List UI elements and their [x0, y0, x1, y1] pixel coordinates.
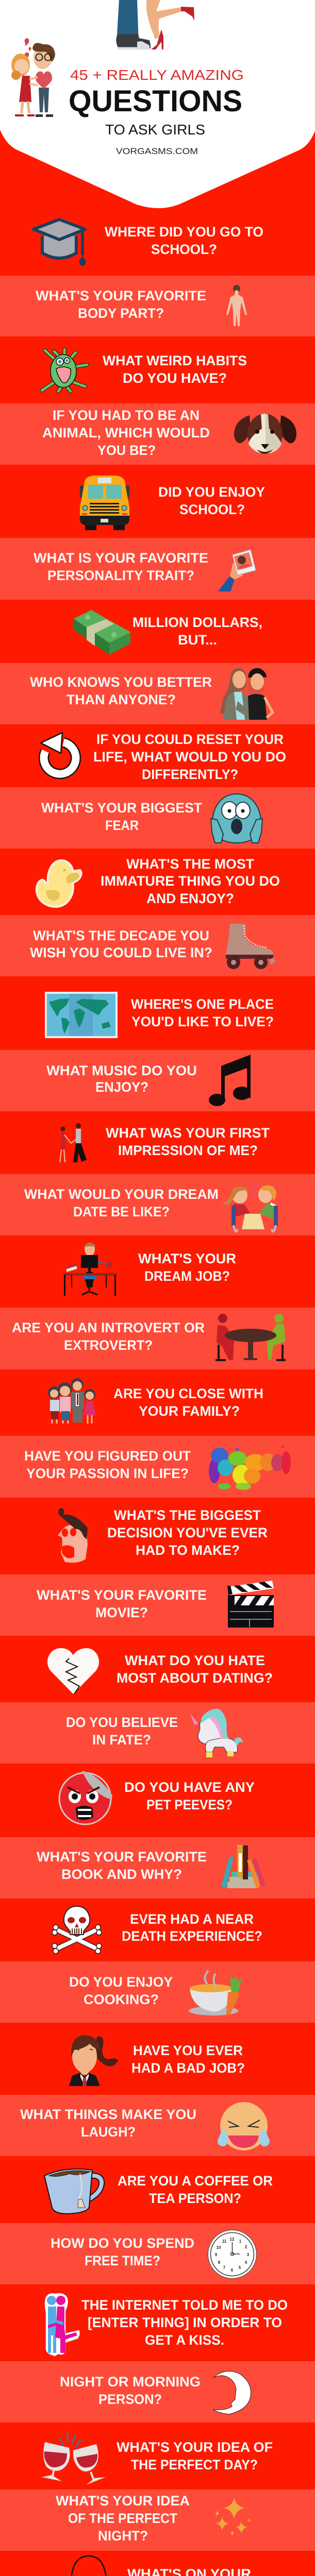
panel: question 22: [0, 1574, 315, 1636]
icon: green germ monster: [42, 349, 87, 392]
question text: GET A KISS.: [145, 2332, 224, 2348]
title: VORGASMS.COM: [116, 146, 198, 156]
question text: DIFFERENTLY?: [142, 767, 238, 782]
question text: [ENTER THING] IN ORDER TO: [88, 2315, 282, 2330]
panel: question 4: [0, 403, 315, 465]
question text: DO YOU HAVE?: [123, 370, 227, 386]
panel: question 24: [0, 1702, 315, 1764]
panel: question 12: [0, 915, 315, 976]
panel: question 35: [0, 2422, 315, 2489]
question text: DO YOU BELIEVE: [66, 1715, 178, 1730]
question text: FREE TIME?: [85, 2253, 160, 2268]
icon: crescent moon: [213, 2371, 251, 2414]
icon: world map: [45, 992, 118, 1038]
icon: couple holding hands: [60, 1123, 87, 1162]
question text: WHAT IS YOUR FAVORITE: [34, 550, 208, 566]
question text: WHAT WOULD YOUR DREAM: [24, 1187, 219, 1202]
question text: WHAT'S YOUR IDEA: [56, 2493, 190, 2509]
question text: [36, 288, 206, 321]
question text: DATE BE LIKE?: [73, 1204, 170, 1219]
question text: THAN ANYONE?: [67, 692, 176, 707]
question text: OF THE PERFECT: [68, 2511, 177, 2526]
question text: [122, 1911, 262, 1944]
panel: question 7: [0, 600, 315, 663]
question text: [117, 1653, 273, 1686]
question text: WHO KNOWS YOU BETTER: [30, 674, 212, 690]
question text: [37, 1849, 207, 1882]
icon: shouting man head: [58, 1508, 88, 1563]
question text: IN FATE?: [92, 1732, 151, 1748]
question text: MILLION DOLLARS,: [132, 615, 262, 630]
panel: question 36: [0, 2489, 315, 2551]
question text: [41, 800, 202, 833]
question text: [138, 1251, 236, 1284]
question text: MOST ABOUT DATING?: [117, 1670, 273, 1686]
question text: YOUR FAMILY?: [139, 1403, 240, 1419]
icon: laughing emoji: [218, 2102, 270, 2150]
question text: WHAT'S YOUR FAVORITE: [36, 288, 206, 303]
icon: reset arrow: [41, 733, 76, 774]
question text: WHAT'S THE MOST: [126, 856, 254, 872]
question text: BOOK AND WHY?: [61, 1867, 182, 1882]
title: TO ASK GIRLS: [105, 122, 205, 138]
question text: ARE YOU A COFFEE OR: [118, 2173, 273, 2189]
icon: wall clock: 5: [239, 2265, 241, 2270]
question text: [30, 928, 212, 960]
question text: EXTROVERT?: [64, 1337, 153, 1353]
panel: question 33: [0, 2284, 315, 2361]
panel: question 26: [0, 1837, 315, 1899]
question text: TEA PERSON?: [149, 2191, 241, 2206]
question text: [51, 2235, 194, 2268]
question text: WHAT MUSIC DO YOU: [46, 1063, 197, 1078]
icon: sparkles: [215, 2498, 251, 2536]
question text: [103, 353, 247, 386]
question text: WHAT'S YOUR: [138, 1251, 236, 1266]
question text: COOKING?: [84, 1992, 159, 2007]
question text: WISH YOU COULD LIVE IN?: [30, 945, 212, 960]
panel: question 20: [0, 1436, 315, 1498]
panel: question 34: [0, 2361, 315, 2422]
question text: YOU'D LIKE TO LIVE?: [131, 1014, 274, 1029]
question text: [118, 2173, 273, 2206]
question text: HAVE YOU FIGURED OUT: [24, 1448, 191, 1464]
question text: SCHOOL?: [151, 242, 217, 257]
icon: wall clock: [208, 2230, 257, 2278]
question text: [106, 1125, 270, 1158]
panel: question 13: [0, 976, 315, 1050]
panel: question 6: [0, 538, 315, 600]
icon: wall clock: 11: [222, 2239, 227, 2244]
icon: wall clock: 8: [218, 2260, 221, 2265]
question text: [81, 2297, 288, 2348]
question text: WHERE DID YOU GO TO: [105, 224, 263, 240]
panel: question 31: [0, 2156, 315, 2223]
question text: [124, 1780, 255, 1812]
question text: [101, 856, 280, 906]
icon: unicorn: [190, 1709, 243, 1757]
title: 45 + REALLY AMAZING: [70, 67, 244, 83]
question text: THE INTERNET TOLD ME TO DO: [81, 2297, 288, 2313]
icon: hand holding photo: [218, 550, 256, 591]
question text: IMPRESSION OF ME?: [118, 1143, 258, 1158]
icon: wall clock: 3: [247, 2252, 250, 2257]
panel: question 28: [0, 1961, 315, 2023]
icon: wall clock: 12: [230, 2237, 235, 2242]
question text: LAUGH?: [81, 2124, 136, 2140]
question text: WHAT THINGS MAKE YOU: [20, 2107, 196, 2122]
question text: [20, 2107, 196, 2140]
panel: question 17: [0, 1235, 315, 1308]
icon: stack of books: [221, 1845, 266, 1888]
panel: question 1: [34, 219, 263, 266]
question text: YOU BE?: [97, 443, 156, 458]
panel: question 8: [0, 663, 315, 724]
question text: [42, 408, 210, 458]
question text: BODY PART?: [78, 306, 164, 321]
question text: AND ENJOY?: [146, 891, 234, 906]
header panel: [0, 0, 315, 208]
question text: [69, 1974, 173, 2007]
icon: two people at table: [215, 1314, 286, 1360]
icon: angry face sticker: [59, 1771, 112, 1824]
icon: wall clock: 10: [217, 2245, 221, 2250]
question text: HAD A BAD JOB?: [131, 2060, 245, 2076]
question text: DID YOU ENJOY: [158, 484, 265, 500]
question text: WHAT'S YOUR IDEA OF: [117, 2439, 273, 2455]
question text: WHAT'S THE BIGGEST: [114, 1507, 261, 1523]
icon: soup bowl and carrot: [189, 1971, 242, 2015]
question text: [113, 1386, 263, 1419]
question text: WHAT'S YOUR FAVORITE: [37, 1849, 207, 1865]
question text: HAVE YOU EVER: [133, 2043, 243, 2058]
icon: wall clock: 6: [231, 2268, 234, 2273]
panel: question 32: [0, 2223, 315, 2284]
icon: music notes: [209, 1055, 251, 1106]
question text: WHERE'S ONE PLACE: [131, 996, 274, 1012]
question text: WHAT'S THE DECADE YOU: [33, 928, 209, 943]
panel: question 16: [0, 1174, 315, 1235]
icon: kissing figures sticker: [45, 2293, 80, 2356]
question text: [60, 2374, 201, 2407]
icon: school bus: [80, 476, 129, 530]
question text: DO YOU ENJOY: [69, 1974, 173, 1990]
panel: question 10: [0, 787, 315, 849]
icon: dog face: [234, 414, 296, 454]
panel: question 5: [0, 465, 315, 538]
question text: [30, 674, 212, 707]
question text: WHAT'S YOUR FAVORITE: [37, 1587, 207, 1603]
panel: question 25: [0, 1764, 315, 1837]
icon: wall clock: 2: [245, 2245, 247, 2249]
question text: [24, 1187, 219, 1219]
question text: IF YOU COULD RESET YOUR: [96, 732, 284, 747]
panel: question 14: [0, 1050, 315, 1111]
title: [69, 67, 244, 156]
panel: question 15: [0, 1111, 315, 1174]
question text: [105, 224, 263, 257]
question text: WHAT DO YOU HATE: [125, 1653, 265, 1668]
question text: [93, 732, 286, 782]
icon: wall clock: 7: [223, 2265, 226, 2270]
question text: WHAT'S YOUR BIGGEST: [41, 800, 202, 816]
icon: skull and crossbones: [52, 1906, 102, 1954]
question text: [66, 1715, 178, 1748]
question text: ENJOY?: [95, 1079, 148, 1095]
icon: stack of money: [74, 610, 130, 655]
question text: IMMATURE THING YOU DO: [101, 873, 280, 889]
title: QUESTIONS: [69, 84, 242, 118]
panel: question 23: [0, 1636, 315, 1702]
question text: [46, 1063, 197, 1095]
question text: MOVIE?: [95, 1605, 148, 1620]
panel: question 21: [0, 1498, 315, 1574]
panel: question 18: [0, 1308, 315, 1369]
question text: NIGHT OR MORNING: [60, 2374, 201, 2389]
question text: PERSONALITY TRAIT?: [47, 568, 194, 583]
panel: question 27: [0, 1899, 315, 1961]
question text: [117, 2439, 273, 2472]
question text: ARE YOU AN INTROVERT OR: [12, 1320, 205, 1335]
question text: [132, 615, 262, 648]
panel: question 9: [0, 724, 315, 787]
question text: HOW DO YOU SPEND: [51, 2235, 194, 2251]
icon: graduation cap: [34, 219, 86, 266]
icon: wall clock: 9: [215, 2252, 218, 2257]
icon: film clapperboard: [227, 1581, 274, 1628]
icon: broken heart: [47, 1648, 99, 1694]
icon: mug with tea bag: [44, 2169, 102, 2214]
icon: couple on dinner date: [221, 1180, 278, 1231]
icon: rainbow paint splash: [209, 1443, 291, 1490]
question text: PERSON?: [98, 2392, 162, 2407]
panel: question 19: [0, 1369, 315, 1436]
question text: DREAM JOB?: [144, 1268, 230, 1284]
panel: question 3: [0, 336, 315, 403]
question text: ARE YOU CLOSE WITH: [113, 1386, 263, 1401]
icon: scared face: [211, 794, 262, 843]
illustration: kissing couple legs: [116, 0, 194, 49]
icon: person at desk: [63, 1243, 117, 1296]
question text: [12, 1320, 205, 1353]
icon: wall clock: 1: [239, 2239, 242, 2244]
question text: ANIMAL, WHICH WOULD: [42, 425, 210, 440]
question text: NIGHT?: [98, 2528, 148, 2544]
icon: wall clock: 4: [245, 2260, 247, 2265]
question text: WHAT WAS YOUR FIRST: [106, 1125, 270, 1141]
question text: DEATH EXPERIENCE?: [122, 1928, 262, 1944]
panel: question 29: [0, 2023, 315, 2095]
icon: human body: [226, 285, 247, 326]
question text: DECISION YOU'VE EVER: [107, 1525, 268, 1540]
panel: question 37: [0, 2551, 315, 2576]
question text: IF YOU HAD TO BE AN: [53, 408, 200, 423]
question text: FEAR: [105, 818, 139, 833]
illustration: cartoon couple holding heart: [11, 38, 55, 117]
question text: [37, 1587, 207, 1620]
question text: [131, 2043, 245, 2076]
panel: question 11: [0, 849, 315, 915]
question text: SCHOOL?: [179, 502, 245, 517]
icon: clinking wine glasses: [41, 2432, 106, 2485]
icon: family: [48, 1378, 96, 1423]
question text: DO YOU HAVE ANY: [124, 1780, 255, 1795]
question text: [24, 1448, 191, 1481]
question text: BUT...: [178, 632, 217, 648]
icon: bucket: [71, 2556, 106, 2576]
question text: [107, 1507, 268, 1558]
question text: [131, 996, 274, 1029]
icon: rubber duck: [37, 860, 81, 907]
question text: PET PEEVES?: [146, 1797, 233, 1812]
question text: WHAT WEIRD HABITS: [103, 353, 247, 368]
question text: YOUR PASSION IN LIFE?: [26, 1466, 189, 1481]
question text: [56, 2493, 190, 2544]
question text: [158, 484, 265, 517]
question text: THE PERFECT DAY?: [131, 2457, 258, 2472]
question text: LIFE, WHAT WOULD YOU DO: [93, 749, 286, 765]
question text: [34, 550, 208, 583]
question text: EVER HAD A NEAR: [130, 1911, 254, 1927]
icon: laughing woman in suit: [69, 2035, 118, 2086]
icon: roller skate: [226, 924, 275, 969]
question text: HAD TO MAKE?: [136, 1543, 240, 1558]
panel: question 30: [0, 2095, 315, 2156]
icon: two friends: [220, 668, 273, 720]
panel: question 2: [0, 276, 315, 336]
